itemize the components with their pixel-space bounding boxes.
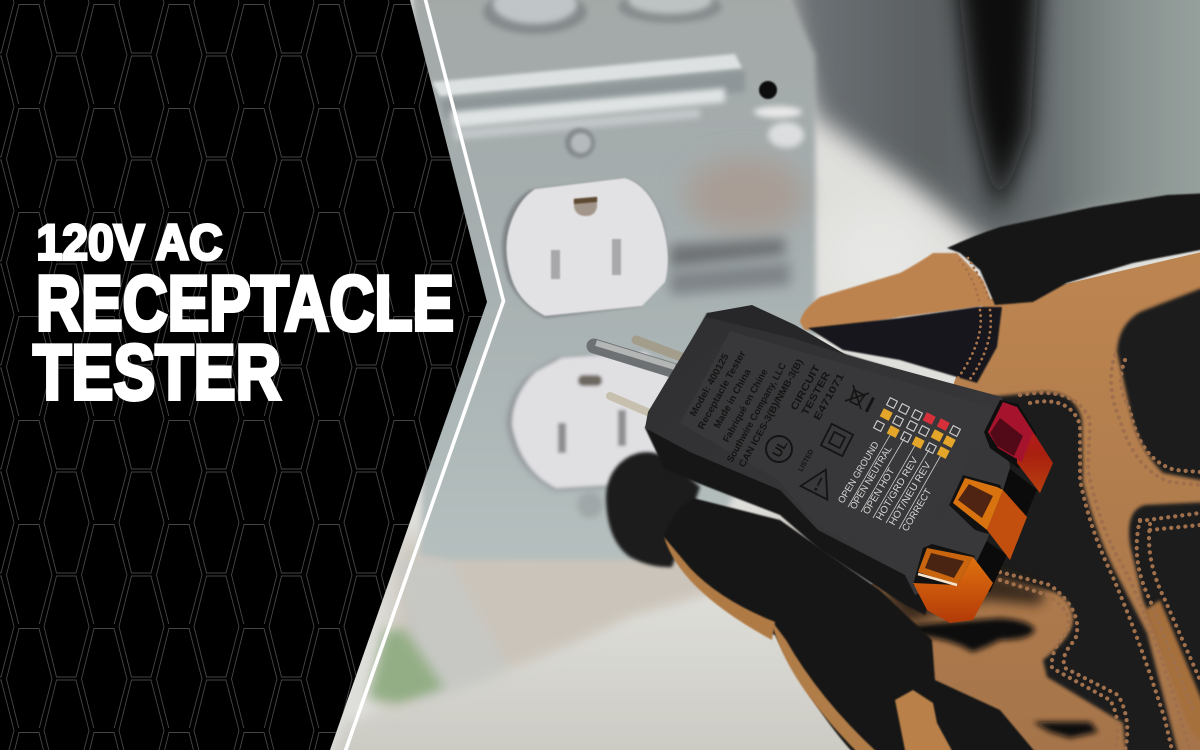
label: model text: Fabriqué en Chine bbox=[721, 367, 770, 444]
photo: metal electrical box bbox=[412, 0, 816, 560]
title bbox=[33, 214, 454, 416]
upper receptacle bbox=[502, 178, 668, 318]
white chevron stroke bbox=[345, 0, 504, 750]
lens end cap black band bbox=[960, 465, 1037, 592]
shaded fold under tester bbox=[880, 570, 1045, 625]
label: model text: TESTER bbox=[800, 369, 833, 417]
indicator lens: middle amber bbox=[949, 475, 1027, 560]
icon: crossed-out bin bbox=[845, 385, 874, 412]
pad: behind tester and lenses bbox=[950, 392, 1180, 750]
glove: palm and pads bbox=[800, 250, 1200, 750]
legend: fault labels: CORRECT bbox=[900, 487, 934, 534]
label: model text bbox=[688, 349, 847, 473]
tester side wall bbox=[645, 313, 1000, 615]
label: model text: Receptacle Tester bbox=[696, 349, 748, 431]
pad: right lower bbox=[1129, 502, 1200, 720]
pad: upper right bbox=[1117, 285, 1200, 482]
icon: warning triangle bbox=[801, 463, 839, 500]
label: model text: Model: 400125 bbox=[688, 351, 732, 418]
circuit tester body bbox=[645, 305, 1037, 615]
indicator lens: red bbox=[984, 400, 1053, 493]
lower receptacle bbox=[507, 352, 680, 490]
legend: fault labels: OPEN NEUTRAL bbox=[848, 444, 895, 512]
tester top face bbox=[645, 317, 1010, 595]
legend: fault labels: OPEN GROUND bbox=[836, 440, 882, 506]
tester plug end bbox=[700, 305, 855, 400]
label: model text: E471071 bbox=[812, 371, 847, 422]
photo: blurred workshop background bbox=[300, 0, 1200, 750]
glove: upper knit finger bbox=[947, 193, 1200, 305]
indicator lens: bottom amber bbox=[913, 544, 993, 623]
label: model text: CAN ICES-3(B)/NMB-3(B) bbox=[737, 357, 806, 469]
title line: 120V AC: 120V AC bbox=[36, 214, 222, 270]
crease shadow bbox=[895, 618, 1035, 652]
title line: TESTER: TESTER bbox=[33, 328, 281, 416]
label: model text: Made in China bbox=[712, 367, 754, 430]
icon: double insulated square bbox=[821, 424, 853, 456]
label: model text: CIRCUIT bbox=[789, 363, 823, 412]
stitching bbox=[1000, 355, 1200, 750]
black chevron panel with hexagon pattern bbox=[0, 0, 487, 750]
label: model text: LISTED bbox=[798, 449, 815, 473]
glove: left fingers bbox=[606, 452, 1042, 750]
icon: UL listed mark: UL bbox=[769, 437, 791, 460]
legend: fault labels bbox=[836, 440, 934, 534]
glove: tan fingertip bbox=[800, 253, 993, 330]
glove: black finger band with stitches bbox=[808, 258, 1002, 383]
legend: fault labels: HOT/NEU REV bbox=[887, 460, 934, 528]
title line: RECEPTACLE: RECEPTACLE bbox=[36, 259, 454, 347]
legend: fault labels: OPEN HOT bbox=[861, 466, 897, 517]
label: model text: Southwire Company, LLC bbox=[725, 361, 789, 464]
legend: fault labels: HOT/GRD REV bbox=[874, 455, 921, 523]
plug prongs bbox=[594, 340, 684, 414]
status light grid bbox=[874, 398, 960, 459]
